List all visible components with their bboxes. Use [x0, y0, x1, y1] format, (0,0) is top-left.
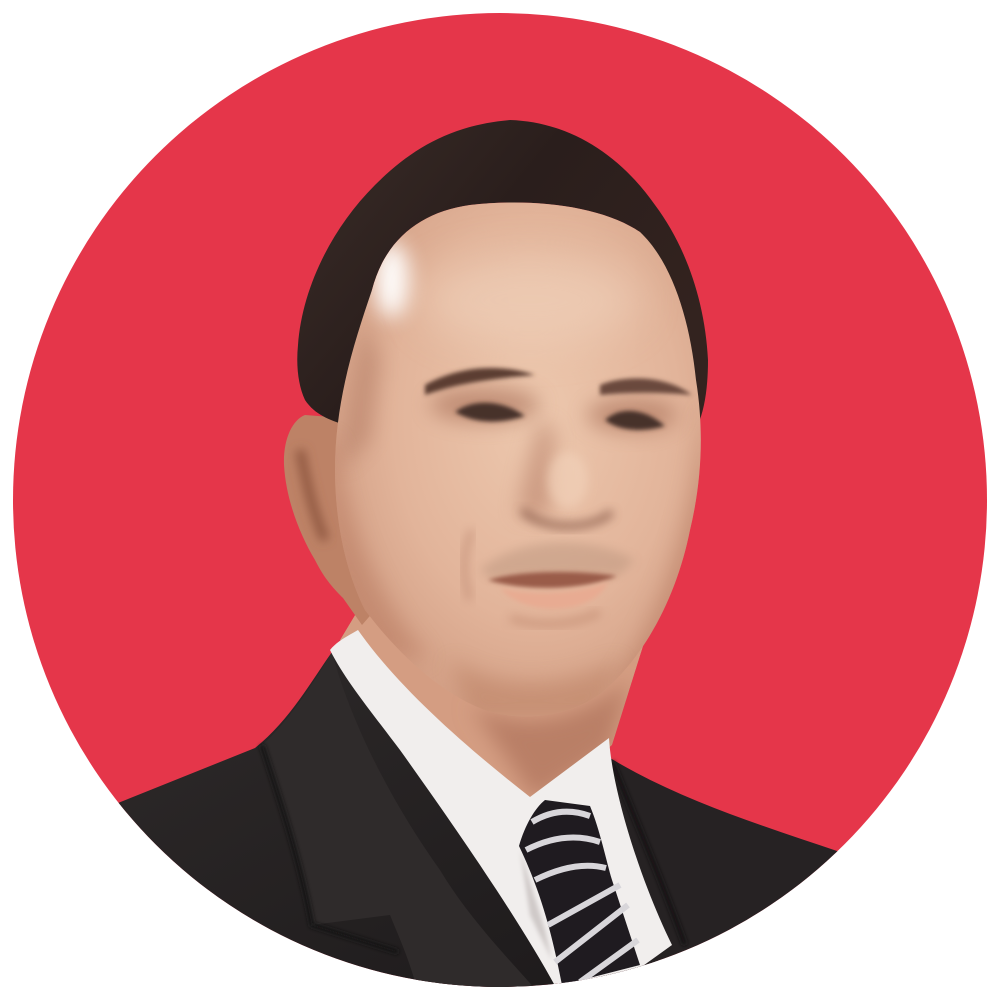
lower lip shadow — [510, 612, 600, 624]
neck — [340, 615, 643, 797]
ear — [284, 415, 375, 625]
lower lip — [508, 588, 601, 606]
jaw shadow — [454, 664, 613, 716]
mouth — [488, 572, 617, 588]
hair — [297, 120, 708, 425]
right eye socket shadow — [587, 398, 677, 432]
forehead highlight — [374, 242, 410, 318]
right eye — [605, 411, 665, 430]
face side shadow right — [618, 444, 700, 676]
left eyebrow — [425, 368, 535, 395]
forehead glow — [427, 256, 632, 338]
face — [335, 202, 701, 709]
nose left shadow — [518, 420, 555, 515]
figure — [100, 120, 840, 1000]
right eyebrow — [600, 378, 692, 395]
nose tip highlight — [548, 452, 588, 508]
nostril shadow — [522, 510, 612, 526]
left eye socket shadow — [430, 387, 540, 423]
cheek fold — [464, 530, 472, 600]
left eye — [455, 403, 525, 422]
suit jacket — [100, 652, 840, 1000]
necktie — [519, 800, 640, 985]
temple shadow — [340, 320, 380, 470]
white shirt and collar — [330, 630, 672, 995]
face side shadow left — [335, 450, 422, 660]
moustache area shadow — [480, 542, 635, 578]
neck shadow — [478, 686, 628, 796]
